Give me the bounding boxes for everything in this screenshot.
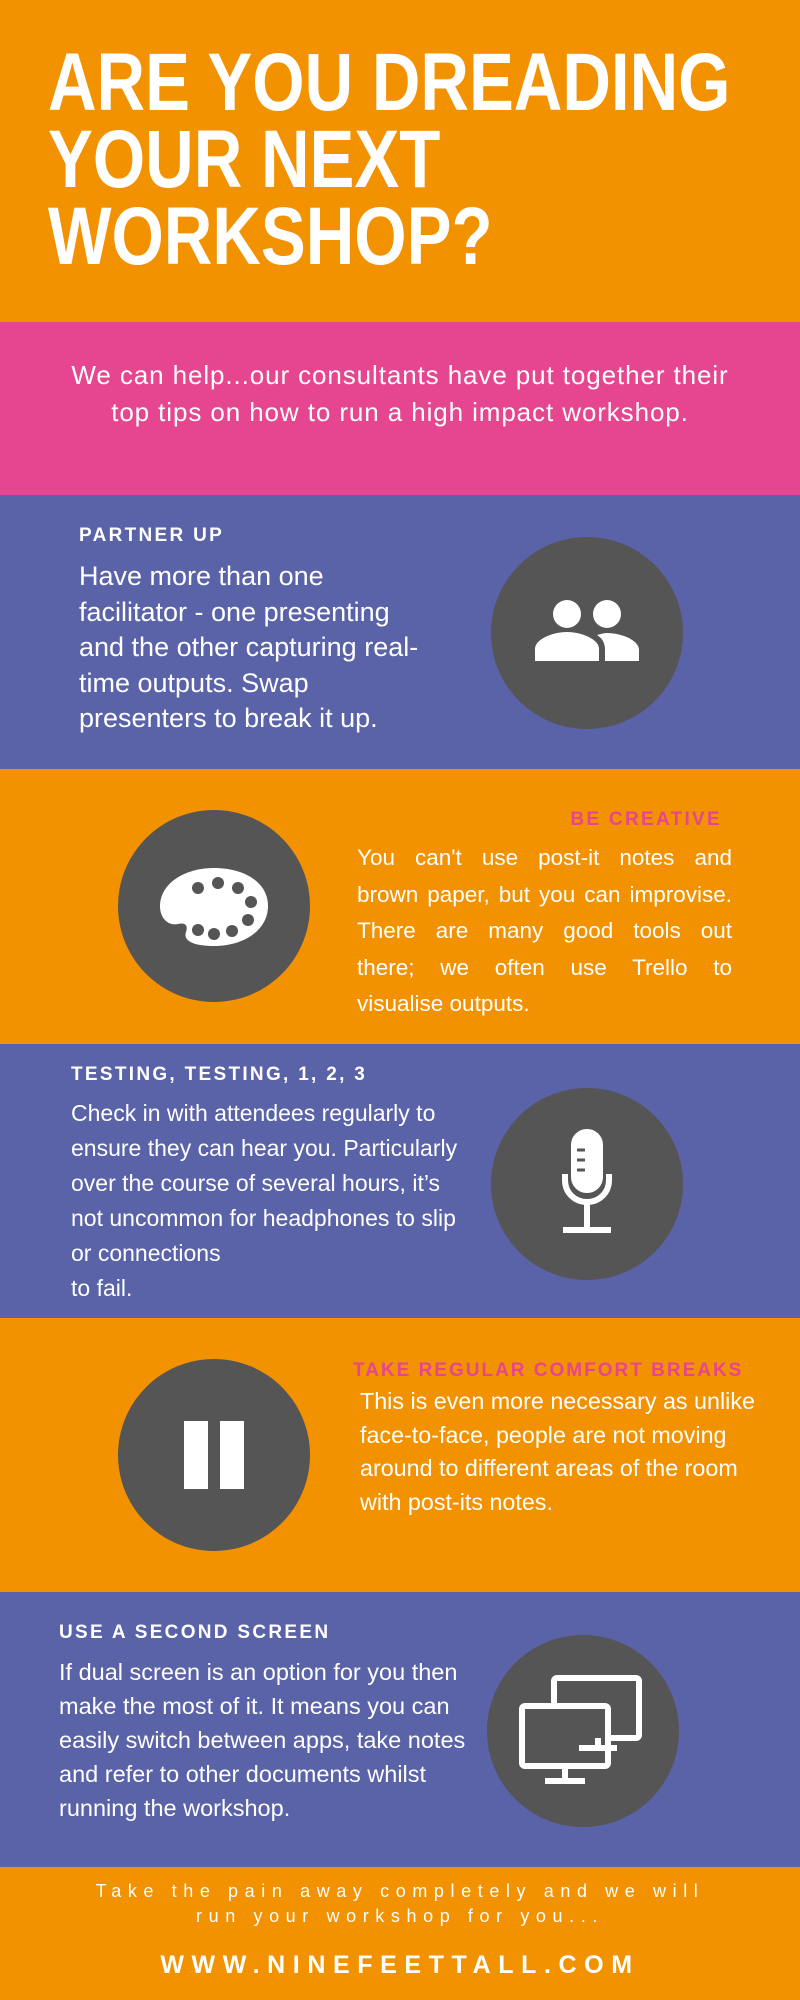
text: be creative: visualise outputs. xyxy=(357,991,530,1016)
panel: partner up xyxy=(0,495,800,769)
text: be creative: there; we often use Trello to xyxy=(357,954,732,980)
text: partner up xyxy=(79,561,418,733)
text: be creative xyxy=(357,845,732,1016)
text: comfort breaks xyxy=(360,1388,755,1515)
text: second screen: and refer to other documents whilst xyxy=(59,1761,426,1787)
header panel xyxy=(0,0,800,322)
text: partner up: facilitator - one presenting xyxy=(79,596,390,626)
heading: partner up: PARTNER UP xyxy=(79,525,224,546)
text: second screen: If dual screen is an option for you then xyxy=(59,1659,457,1685)
icon: monitors xyxy=(487,1635,679,1827)
text: second screen xyxy=(59,1659,465,1821)
text: comfort breaks: face-to-face, people are not moving xyxy=(360,1422,726,1448)
title: WORKSHOP? xyxy=(48,191,493,282)
panel: be creative xyxy=(0,769,800,1044)
text: testing xyxy=(71,1100,458,1301)
text: be creative: You can't use post-it notes and xyxy=(357,845,732,870)
text: comfort breaks: This is even more necessary as unlike xyxy=(360,1388,755,1414)
icon: people xyxy=(491,537,683,729)
heading: testing: TESTING, TESTING, 1, 2, 3 xyxy=(71,1064,367,1085)
footer tagline: Take the pain away completely and we will xyxy=(96,1881,704,1901)
heading: comfort breaks: TAKE REGULAR COMFORT BREAKS xyxy=(353,1360,743,1381)
title xyxy=(48,37,730,282)
text: comfort breaks: with post-its notes. xyxy=(360,1488,553,1514)
text: partner up: time outputs. Swap xyxy=(79,668,309,698)
text: comfort breaks: around to different areas of the room xyxy=(360,1455,738,1481)
text: partner up: presenters to break it up. xyxy=(79,703,378,733)
panel: second screen xyxy=(0,1592,800,1867)
footer tagline xyxy=(96,1881,704,1926)
title: YOUR NEXT xyxy=(48,114,440,205)
icon: microphone xyxy=(491,1088,683,1280)
text: be creative: There are many good tools out xyxy=(357,918,732,943)
text: testing: to fail. xyxy=(71,1275,132,1301)
text: be creative: brown paper, but you can improvise. xyxy=(357,882,732,906)
text: partner up: Have more than one xyxy=(79,561,324,591)
website url: WWW.NINEFEETTALL.COM xyxy=(160,1951,640,1979)
text: partner up: and the other capturing real- xyxy=(79,632,418,662)
icon: palette xyxy=(118,810,310,1002)
footer panel xyxy=(0,1867,800,2000)
text: testing: not uncommon for headphones to slip xyxy=(71,1205,456,1231)
intro panel xyxy=(0,322,800,495)
title: ARE YOU DREADING xyxy=(48,37,730,128)
text: second screen: make the most of it. It means you can xyxy=(59,1693,450,1719)
heading: second screen: USE A SECOND SCREEN xyxy=(59,1622,330,1643)
icon: pause xyxy=(118,1359,310,1551)
heading: be creative: BE CREATIVE xyxy=(570,809,722,830)
intro text: We can help...our consultants have put together their xyxy=(71,360,729,390)
intro text: top tips on how to run a high impact workshop. xyxy=(111,397,689,427)
text: testing: ensure they can hear you. Particularly xyxy=(71,1135,457,1161)
text: testing: or connections xyxy=(71,1240,221,1266)
panel: comfort breaks xyxy=(0,1318,800,1592)
text: second screen: running the workshop. xyxy=(59,1795,290,1821)
text: testing: Check in with attendees regularly to xyxy=(71,1100,435,1126)
text: second screen: easily switch between apps, take notes xyxy=(59,1727,465,1753)
intro text xyxy=(71,360,729,427)
panel: testing xyxy=(0,1044,800,1318)
text: testing: over the course of several hours, it’s xyxy=(71,1170,440,1196)
footer tagline: run your workshop for you... xyxy=(196,1906,604,1926)
